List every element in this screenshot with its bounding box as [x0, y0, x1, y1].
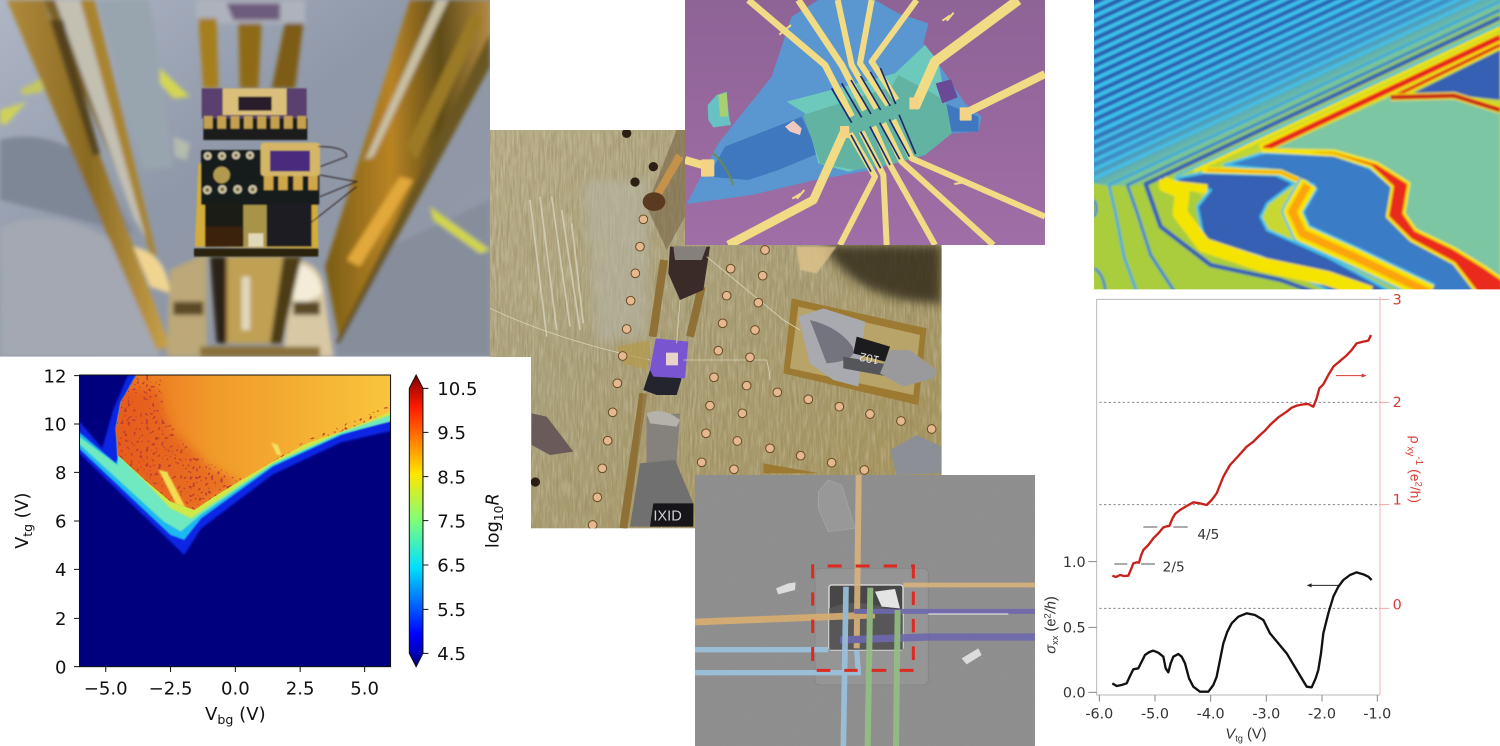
colour bar: 5.5 [437, 600, 466, 621]
colour bar: 9.5 [437, 423, 466, 444]
fractional plateau markers [1114, 527, 1219, 576]
y tick labels: 12 [44, 367, 67, 387]
photo: optical micrograph of gated device [685, 0, 1045, 245]
axis ticks [74, 376, 365, 672]
left ticks and labels: -1.0 [1363, 706, 1391, 722]
right axis label: (e [1408, 465, 1424, 482]
y axis label: V [12, 537, 33, 549]
colour bar: 10.5 [437, 379, 478, 400]
photo: gold sample holder with chip sockets [0, 0, 490, 357]
left ticks and labels: 0.0 [1063, 685, 1086, 701]
colour bar label: R [483, 493, 504, 505]
y tick labels: 8 [55, 463, 67, 484]
colour bar: 4.5 [437, 644, 466, 665]
yellow-orange band [1202, 170, 1307, 184]
left ticks and labels: 0.5 [1063, 621, 1086, 637]
y tick labels: 2 [55, 609, 67, 630]
left axis label: /h [1043, 601, 1059, 614]
plot frame [1097, 299, 1380, 695]
blue plateau regions [1176, 173, 1394, 293]
left axis label: xx [1050, 635, 1060, 645]
green central region [1274, 95, 1500, 293]
left ticks and labels: -3.0 [1252, 706, 1280, 722]
right red ticks and labels: 3 [1393, 292, 1402, 308]
right axis label: -1 [1413, 456, 1424, 466]
yellow fringe band [1159, 170, 1431, 293]
false-colour leads [695, 475, 1035, 746]
panel: resistance colour map [0, 357, 531, 746]
flake: blue [687, 0, 982, 204]
y axis label: tg [20, 524, 35, 537]
x tick labels: 0.0 [221, 679, 250, 699]
diagonal fringes [1094, 0, 1388, 137]
lower-left yellow-green region [1094, 182, 1399, 290]
gold electrodes [685, 0, 1045, 245]
right red ticks and labels: 0 [1393, 597, 1402, 613]
x axis label: (V) [1243, 726, 1267, 742]
left axis label: 2 [1043, 613, 1053, 619]
colour bar label: log [483, 521, 504, 548]
y tick labels [44, 367, 67, 678]
black curve [1112, 572, 1372, 692]
arrow: black pointing left [1307, 583, 1338, 587]
colour bar [409, 375, 478, 667]
right red ticks and labels: 1 [1393, 492, 1402, 508]
red curve [1112, 335, 1371, 577]
y tick labels: 4 [55, 560, 67, 581]
left ticks and labels: -4.0 [1197, 706, 1225, 722]
left ticks and labels: -2.0 [1308, 706, 1336, 722]
photo: circuit board with mounted purple chip: IXID [653, 509, 682, 525]
y tick labels: 10 [44, 415, 67, 436]
colour bar: 8.5 [437, 468, 466, 488]
x tick labels: −2.5 [149, 679, 192, 699]
left ticks and labels: 1.0 [1063, 555, 1086, 571]
photo: circuit board with mounted purple chip: 102 [858, 350, 881, 367]
fractional plateau markers: 4/5 [1197, 527, 1219, 543]
right axis label: 2 [1413, 482, 1423, 487]
left axis label: (e [1043, 619, 1059, 636]
x tick labels: 5.0 [350, 679, 379, 699]
flake: teal [787, 45, 952, 172]
x axis label: (V) [233, 704, 266, 725]
red band edges [1261, 37, 1500, 293]
dark gate slits [832, 68, 916, 172]
left axis label: ) [1043, 596, 1059, 601]
arrow: red pointing right [1336, 374, 1367, 378]
right axis label: ρ [1408, 436, 1424, 444]
photo: false-colour SEM image of device [695, 475, 1035, 746]
dashed quantised levels [1099, 402, 1380, 608]
y axis label: (V) [12, 493, 33, 524]
photo: circuit board with mounted purple chip [490, 129, 942, 529]
x tick labels: −5.0 [84, 679, 128, 699]
x tick labels: 2.5 [286, 679, 315, 699]
left ticks and labels: -5.0 [1141, 706, 1169, 722]
red dashed box [813, 564, 915, 670]
heat map Vbg vs Vtg [79, 375, 391, 667]
left ticks and labels: -6.0 [1085, 706, 1113, 722]
x axis label: tg [1235, 734, 1243, 744]
panel: Hall conductance line chart [1043, 292, 1424, 744]
right red ticks and labels [1380, 292, 1402, 613]
x axis label: bg [217, 712, 233, 727]
colour bar: 6.5 [437, 556, 466, 577]
right red ticks and labels: 2 [1393, 395, 1402, 411]
right axis label: xy [1404, 444, 1415, 456]
y tick labels: 6 [55, 512, 67, 533]
fractional plateau markers: 2/5 [1163, 560, 1185, 576]
right axis label: /h) [1408, 487, 1424, 503]
left axis label: σ [1043, 644, 1059, 654]
colour bar: 7.5 [437, 512, 466, 532]
y tick labels: 0 [55, 658, 67, 678]
panel: false-colour interference map [1091, 0, 1500, 293]
x tick labels [84, 679, 379, 699]
colour bar label: 10 [491, 505, 506, 521]
left ticks and labels [1063, 555, 1391, 722]
x axis label: V [1225, 726, 1236, 742]
x axis label: V [205, 704, 217, 725]
